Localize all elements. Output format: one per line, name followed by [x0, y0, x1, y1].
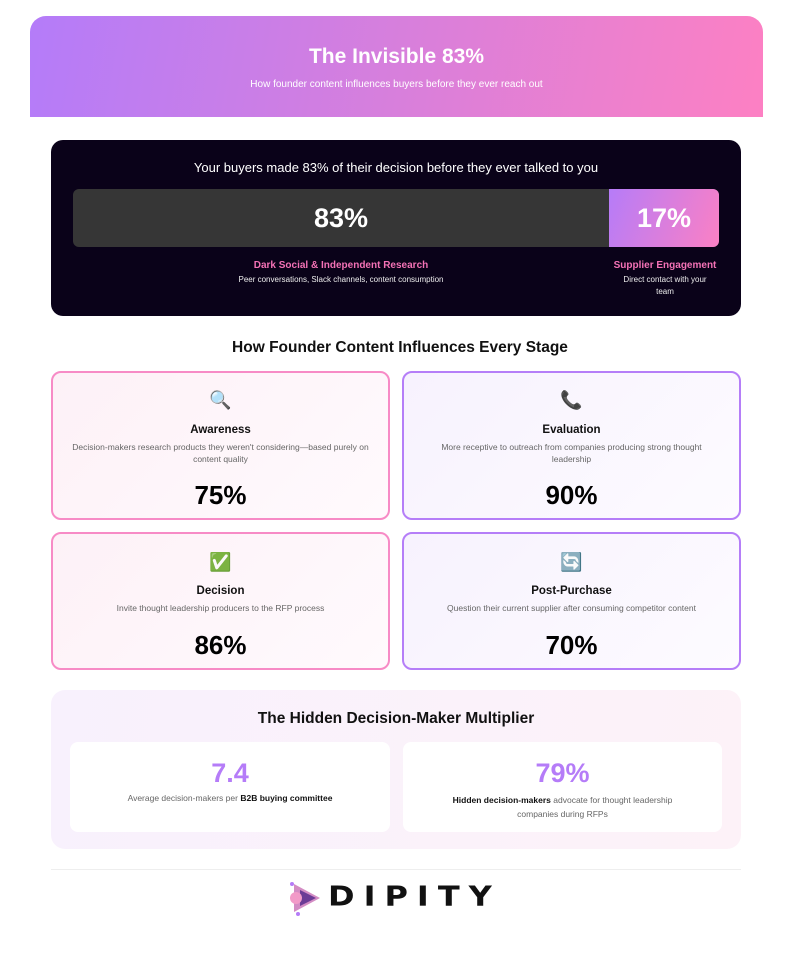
bar: 17% — [609, 189, 719, 247]
icon: refresh: 🔄 — [560, 552, 583, 572]
label: dark social — [238, 260, 444, 284]
card: evaluation — [402, 371, 741, 520]
card: post-purchase — [402, 532, 741, 670]
bar: 83%: 83% — [314, 203, 368, 233]
subtitle: How founder content influences buyers before they ever reach out — [250, 79, 543, 90]
stat: 7.4: Average decision-makers per B2B buying committee — [128, 793, 332, 803]
bar chart — [73, 189, 719, 247]
logo text: DIPITY — [328, 880, 501, 912]
label: supplier: Supplier Engagement — [614, 260, 716, 271]
card: awareness — [51, 371, 390, 520]
card: evaluation: Evaluation — [542, 424, 601, 436]
card: awareness: 75% — [194, 480, 247, 510]
section heading: How Founder Content Influences Every Stage — [232, 339, 568, 356]
card: decision — [51, 532, 390, 670]
stat: 79%: Hidden decision-makers advocate for thought leadership companies during RFPs — [453, 795, 672, 819]
panel: multiplier — [51, 690, 741, 849]
card: evaluation: More receptive to outreach from companies producing strong thought leadership — [441, 442, 702, 464]
card: decision: 86% — [194, 630, 247, 660]
title: The Invisible 83% — [309, 45, 484, 68]
bar: 17%: 17% — [637, 203, 691, 233]
panel: 83% split — [51, 140, 741, 316]
icon: magnifier: 🔍 — [209, 390, 232, 410]
card: awareness: Decision-makers research products they weren't considering—based purely on content quality — [72, 442, 369, 464]
panel heading: Your buyers made 83% of their decision before they ever talked to you — [194, 160, 598, 175]
label: supplier: Direct contact with your team — [623, 275, 707, 296]
card: post-purchase: Question their current supplier after consuming competitor content — [447, 603, 696, 613]
logo — [290, 880, 501, 916]
multiplier heading: The Hidden Decision-Maker Multiplier — [258, 710, 534, 727]
header banner — [30, 16, 763, 117]
card: post-purchase: 70% — [545, 630, 598, 660]
card: awareness: Awareness — [190, 424, 251, 436]
stat: 7.4: 7.4 — [211, 758, 249, 788]
label: dark social: Peer conversations, Slack channels, content consumption — [238, 275, 444, 284]
logo mark — [290, 882, 320, 916]
card: decision: Invite thought leadership producers to the RFP process — [117, 603, 324, 613]
icon: phone: 📞 — [560, 390, 583, 410]
label: dark social: Dark Social & Independent Research — [254, 260, 428, 271]
stat: 79% — [403, 742, 722, 832]
stat: 79%: 79% — [535, 758, 590, 788]
label: supplier — [614, 260, 716, 296]
card: evaluation: 90% — [545, 480, 598, 510]
stat: 7.4 — [70, 742, 390, 832]
card: post-purchase: Post-Purchase — [531, 585, 612, 597]
card: decision: Decision — [197, 585, 244, 597]
icon: check: ✅ — [209, 552, 232, 572]
